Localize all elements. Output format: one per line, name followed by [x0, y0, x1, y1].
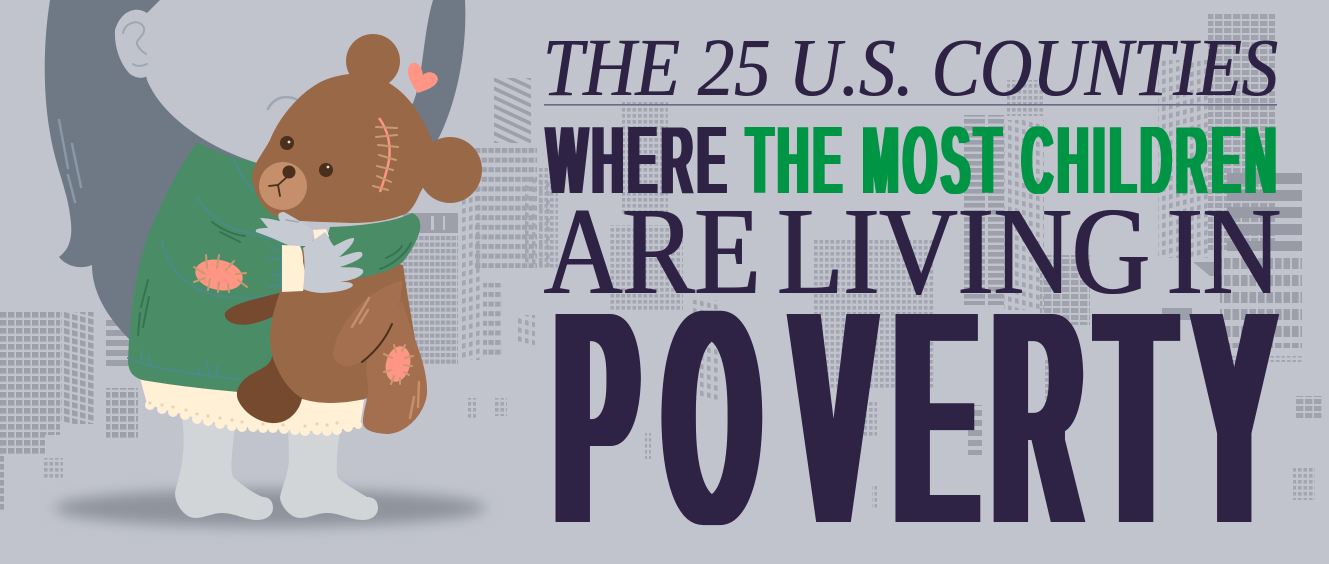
illustration: girl hugging teddy bear: [45, 0, 482, 520]
bear dark leg: [237, 355, 302, 423]
girl right sleeve: [320, 213, 420, 280]
bear upper limb: [333, 280, 402, 366]
bear ears: [346, 34, 482, 203]
bear left arm: [225, 292, 285, 325]
sock right: [280, 428, 378, 520]
sweater creases: [138, 222, 245, 335]
bear head: [252, 73, 432, 223]
bear muzzle: [259, 162, 307, 210]
heart: [408, 63, 438, 93]
small cuff: [313, 229, 329, 248]
ground shadow: [54, 489, 486, 527]
hair strands: [59, 120, 81, 202]
face: [144, 0, 433, 165]
lower glove: [303, 232, 363, 293]
lower cuff: [282, 245, 305, 292]
title line: where the most children: [546, 105, 1280, 215]
bear eyes: [280, 136, 333, 177]
title line: where the most children: WHERE: [546, 105, 730, 215]
bear nose and mouth: [269, 166, 296, 196]
hair: [45, 0, 465, 340]
patch on sweater: [192, 255, 247, 295]
bear scar: [373, 118, 398, 192]
title rule: [544, 104, 1277, 106]
title word: poverty: [556, 242, 1280, 564]
skirt lace: [140, 378, 364, 436]
ear: [115, 10, 150, 78]
bear body: [270, 240, 416, 403]
green dress: [128, 142, 335, 402]
sweater lines: [128, 157, 282, 379]
upper glove: [256, 212, 313, 246]
sock left: [175, 413, 273, 520]
bear hanging leg: [363, 300, 427, 434]
cheek line: [268, 97, 296, 109]
